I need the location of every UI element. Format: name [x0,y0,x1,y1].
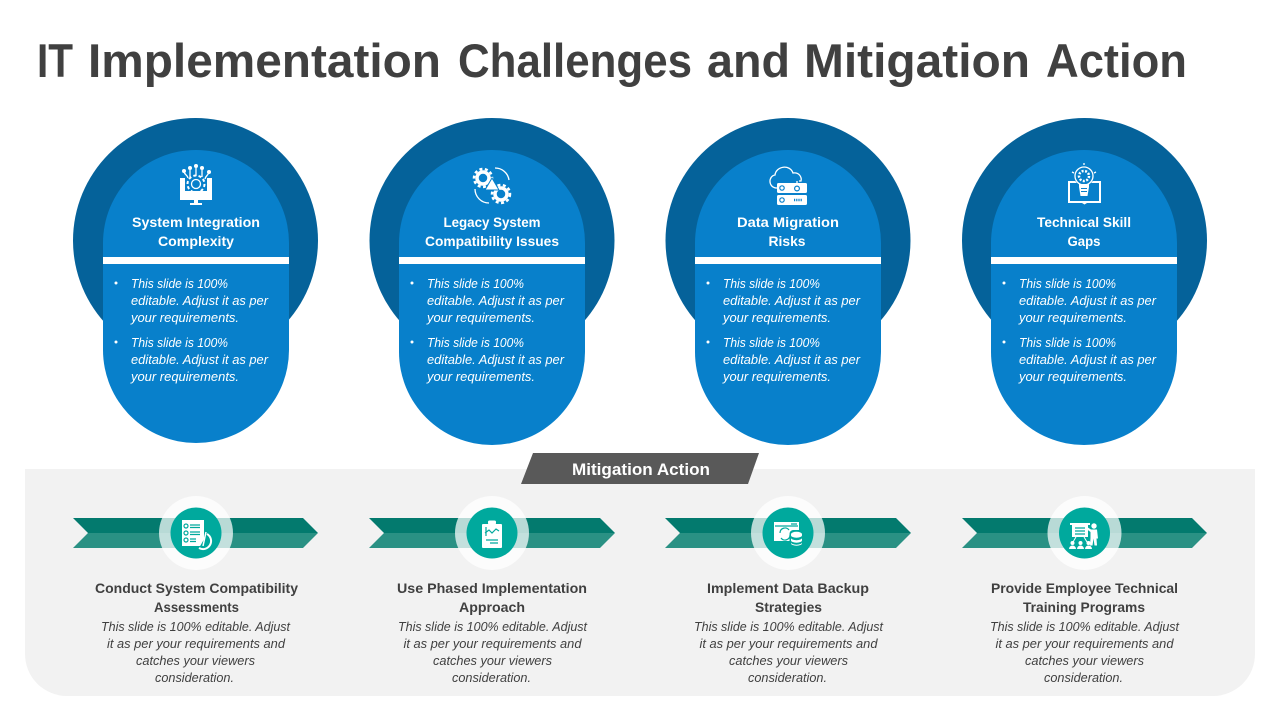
panel: challenge 3 [666,118,910,445]
bullet list: This slide is 100% [427,276,524,291]
heading: system integration complexity: System Integration [132,214,260,230]
heading: technical skill gaps: Technical Skill [1037,214,1131,230]
bullet list: This slide is 100% [131,335,228,350]
panel: challenge 4 [962,118,1207,445]
heading: Provide Employee Technical [991,580,1178,596]
arrow [665,518,911,548]
icon: checklist in teal circle [159,496,233,570]
heading: Training Programs [1023,599,1145,615]
heading: data migration risks: Risks [768,233,806,249]
bullet list: editable. Adjust it as per [427,352,565,367]
bullet list: your requirements. [1018,310,1127,325]
bullet list: editable. Adjust it as per [723,293,861,308]
bullet list [706,276,861,384]
bullet list: This slide is 100% [723,335,820,350]
text block: catches your viewers [1025,653,1144,668]
heading: legacy system compatibility issues [425,214,559,249]
text block: This slide is 100% editable. Adjust [694,619,884,634]
text block: consideration. [155,670,234,685]
title: and [707,34,790,87]
text block: it as per your requirements and [700,636,878,651]
text block: consideration. [452,670,531,685]
bullet list: your requirements. [1018,369,1127,384]
heading [707,580,869,615]
title: Challenges [458,34,692,87]
heading: Use Phased Implementation [397,580,587,596]
bullet list: This slide is 100% [1019,276,1116,291]
arrow [369,518,615,548]
panel: mitigation background [25,469,1255,696]
bullet list: This slide is 100% [723,276,820,291]
text block [990,619,1180,685]
title: IT [37,34,73,87]
text block: consideration. [748,670,827,685]
bullet list: editable. Adjust it as per [723,352,861,367]
text block: This slide is 100% editable. Adjust [990,619,1180,634]
bullet list: your requirements. [130,369,239,384]
bullet list: editable. Adjust it as per [1019,352,1157,367]
mitigation 2 [369,496,615,685]
mitigation 4 [962,496,1207,685]
icon: clipboard in teal circle [455,496,529,570]
heading: system integration complexity: Complexity [158,233,234,249]
bullet list: editable. Adjust it as per [427,293,565,308]
heading [397,580,587,615]
icon: backup window and database in teal circle [751,496,825,570]
heading: technical skill gaps [1037,214,1131,249]
arrow [962,518,1207,548]
text block: This slide is 100% editable. Adjust [101,619,291,634]
banner: mitigation action: Mitigation Action [572,460,710,479]
mitigation 3 [665,496,911,685]
bullet list: your requirements. [426,369,535,384]
heading [991,580,1178,615]
text block: it as per your requirements and [996,636,1174,651]
text block: catches your viewers [433,653,552,668]
bullet list: editable. Adjust it as per [131,352,269,367]
heading: Conduct System Compatibility [95,580,298,596]
text block: it as per your requirements and [404,636,582,651]
heading: Implement Data Backup [707,580,869,596]
heading: technical skill gaps: Gaps [1068,233,1101,249]
heading: legacy system compatibility issues: Compatibility Issues [425,233,559,249]
text block: This slide is 100% editable. Adjust [398,619,588,634]
bullet list: your requirements. [722,310,831,325]
heading: data migration risks [737,214,839,249]
bullet list: This slide is 100% [131,276,228,291]
title: Action [1046,34,1187,87]
bullet list: editable. Adjust it as per [1019,293,1157,308]
text block [694,619,884,685]
bullet list: This slide is 100% [427,335,524,350]
text block: it as per your requirements and [107,636,286,651]
bullet list: editable. Adjust it as per [131,293,269,308]
heading: legacy system compatibility issues: Legacy System [444,214,540,230]
text block [398,619,588,685]
title: Implementation [88,34,441,87]
text block: catches your viewers [729,653,848,668]
panel: challenge 2 [370,118,614,445]
icon: light bulb over book [1068,163,1101,204]
bullet list: your requirements. [722,369,831,384]
heading: Assessments [154,599,239,615]
heading: Approach [459,599,525,615]
icon: monitor with gear [180,164,212,205]
bullet list [1002,276,1157,384]
bullet list: your requirements. [426,310,535,325]
bullet list [114,276,269,384]
heading: system integration complexity [132,214,260,249]
bullet list: This slide is 100% [1019,335,1116,350]
title [37,34,1187,87]
bullet list: your requirements. [130,310,239,325]
icon: cloud and server [770,167,807,205]
mitigation 1 [73,496,318,685]
icon: gears with warning [474,168,510,203]
heading: data migration risks: Data Migration [737,214,839,230]
panel: challenge 1 [73,118,318,443]
bullet list [410,276,565,384]
text block: consideration. [1044,670,1123,685]
arrow [73,518,318,548]
text block [101,619,291,685]
banner: mitigation action [521,453,759,484]
icon: presenter and audience in teal circle [1048,496,1122,570]
heading: Strategies [755,599,822,615]
heading [95,580,298,615]
text block: catches your viewers [136,653,255,668]
title: Mitigation [804,34,1030,87]
